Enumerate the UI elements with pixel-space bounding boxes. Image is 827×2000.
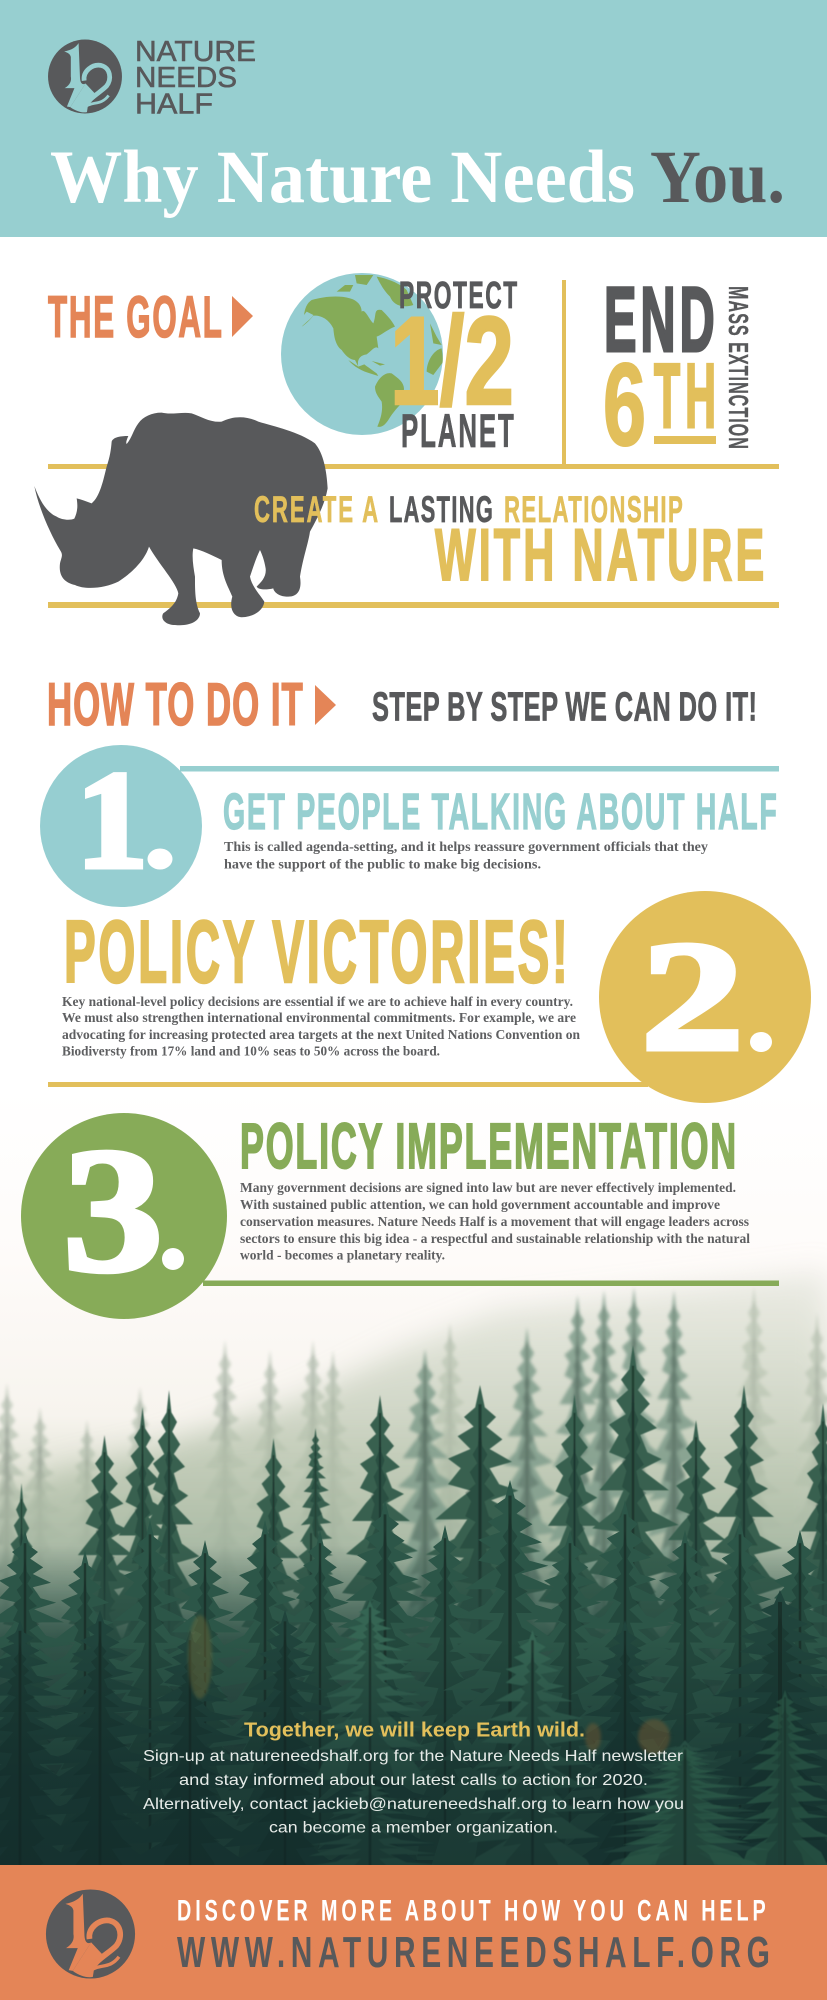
arrow: how to do it xyxy=(315,685,336,725)
step 3 body: Many government decisions are signed into law but are never effectively implemented. xyxy=(240,1181,736,1196)
step 3 rule xyxy=(203,1280,779,1286)
mid fog trees xyxy=(396,1288,696,1634)
step 3 heading: POLICY IMPLEMENTATION xyxy=(240,1110,736,1182)
call to action text xyxy=(143,1720,684,1836)
near tree band xyxy=(0,1480,827,1881)
step 1 heading: GET PEOPLE TALKING ABOUT HALF xyxy=(223,783,777,840)
footer text: DISCOVER MORE ABOUT HOW YOU CAN HELP xyxy=(177,1895,766,1928)
vertical divider xyxy=(562,280,566,466)
call to action text: can become a member organization. xyxy=(269,1820,558,1836)
call to action text: Sign-up at natureneedshalf.org for the Nature Needs Half newsletter xyxy=(143,1748,684,1765)
step 3 badge xyxy=(21,1111,227,1319)
stat: end 6th mass extinction: 6 xyxy=(603,339,646,470)
goal statement: RELATIONSHIP xyxy=(504,489,683,530)
logo wordmark: NATURE xyxy=(135,36,256,68)
step 1 badge: 1 xyxy=(76,743,148,898)
step 3 body: conservation measures. Nature Needs Half is a movement that will engage leaders across xyxy=(240,1215,750,1230)
call to action text: Alternatively, contact jackieb@natureneedshalf.org to learn how you xyxy=(143,1796,684,1813)
title: Why Nature Needs xyxy=(50,136,635,219)
main trees xyxy=(3,1346,827,1670)
step 2 badge xyxy=(599,891,811,1103)
step 1 badge xyxy=(40,743,202,907)
stat: end 6th mass extinction: TH xyxy=(654,346,716,447)
step 2 body: Key national-level policy decisions are essential if we are to achieve half in every country. xyxy=(62,995,573,1010)
stat: protect half planet: PROTECT xyxy=(399,274,517,316)
logo wordmark: HALF xyxy=(135,88,213,120)
step 2 rule xyxy=(48,1082,648,1087)
step 1 body xyxy=(224,840,708,872)
goal statement xyxy=(254,489,764,596)
step 2 body xyxy=(62,995,580,1060)
goal statement: LASTING xyxy=(389,490,493,531)
bottom shade xyxy=(0,1675,827,1865)
step 1 body: have the support of the public to make big decisions. xyxy=(224,858,541,872)
step 3 body: world - becomes a planetary reality. xyxy=(240,1248,445,1264)
footer text xyxy=(177,1895,770,1976)
step 1 rule xyxy=(180,766,779,772)
step 3 body xyxy=(240,1181,750,1264)
step 3 body: sectors to ensure this big idea - a respectful and sustainable relationship with the natural xyxy=(240,1232,750,1247)
step 3 badge: 3 xyxy=(63,1111,163,1309)
far pale trees xyxy=(0,1292,827,1577)
heading: the goal: THE GOAL xyxy=(48,285,222,349)
forest shade fill xyxy=(0,1545,827,1865)
footer text: WWW.NATURENEEDSHALF.ORG xyxy=(177,1927,770,1976)
foreground dark trees xyxy=(0,1590,827,1865)
step 2 body: Biodiversty from 17% land and 10% seas to 50% across the board. xyxy=(62,1044,440,1060)
autumn foliage xyxy=(188,1615,670,1755)
step 2 body: We must also strengthen international environmental commitments. For example, we are xyxy=(62,1011,576,1026)
call to action text: Together, we will keep Earth wild. xyxy=(244,1720,585,1742)
header band xyxy=(0,0,827,237)
icon: rhino silhouette xyxy=(34,413,328,625)
goal statement: WITH NATURE xyxy=(435,514,764,596)
subheading: step by step: STEP BY STEP WE CAN DO IT! xyxy=(372,684,757,730)
title: You. xyxy=(650,136,785,219)
step 1 body: This is called agenda-setting, and it helps reassure government officials that they xyxy=(224,840,708,855)
footer logo xyxy=(46,1889,135,1979)
logo wordmark xyxy=(135,36,256,120)
call to action text: and stay informed about our latest calls to action for 2020. xyxy=(179,1772,648,1789)
step 2 body: advocating for increasing protected area targets at the next United Nations Convention on xyxy=(62,1028,580,1043)
step 3 body: With sustained public attention, we can hold government accountable and improve xyxy=(240,1198,720,1213)
arrow: the goal xyxy=(232,296,253,337)
lighter green foreground trees xyxy=(313,1601,760,1865)
misty hillside xyxy=(0,1268,827,1634)
step 2 badge: 2 xyxy=(641,909,744,1083)
stat: end 6th mass extinction xyxy=(603,267,755,470)
rule xyxy=(48,464,779,469)
heading: how to do it: HOW TO DO IT xyxy=(47,672,303,738)
step 2 heading: POLICY VICTORIES! xyxy=(64,902,568,1001)
footer band xyxy=(0,1865,827,2000)
logo: one-half emblem xyxy=(48,40,122,113)
stat: end 6th mass extinction: END xyxy=(604,267,715,371)
forest photo xyxy=(0,1090,827,1900)
stat: protect half planet: 1/2 xyxy=(390,292,514,431)
stat: end 6th mass extinction: MASS EXTINCTION xyxy=(723,286,755,449)
stat: protect half planet xyxy=(390,274,517,458)
icon: globe xyxy=(281,273,443,435)
right lower highlight xyxy=(620,1690,827,1871)
goal statement: CREATE A xyxy=(254,489,378,530)
stat: protect half planet: PLANET xyxy=(401,406,514,458)
logo wordmark: NEEDS xyxy=(135,62,237,94)
